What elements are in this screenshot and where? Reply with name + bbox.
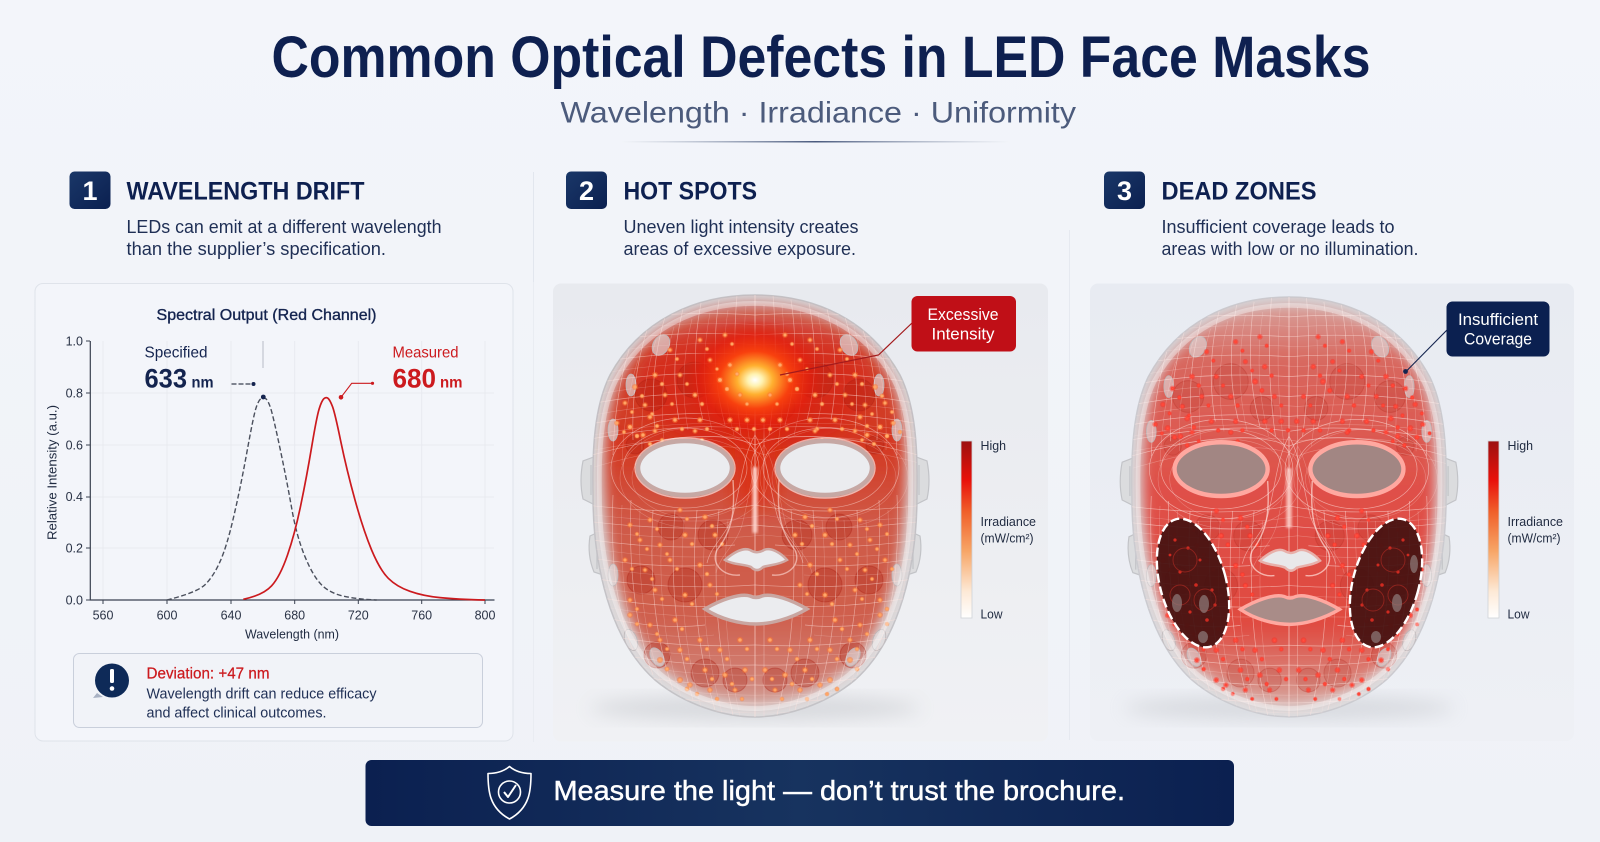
measured curve: [243, 398, 485, 600]
dead zone right: [1337, 511, 1435, 655]
x axis label: Wavelength (nm): [245, 626, 339, 642]
description 3: areas with low or no illumination.: [1162, 239, 1418, 259]
heading 3: DEAD ZONES: [1162, 178, 1316, 206]
mask with hot spot: [581, 295, 934, 727]
title: Common Optical Defects in LED Face Masks: [272, 25, 1370, 90]
mouth: [1240, 596, 1339, 624]
section header 3: dead zones: [1104, 172, 1418, 259]
specified label: Specified: [144, 344, 208, 362]
eye openings: [638, 441, 872, 495]
x axis tick labels: 600: [157, 608, 177, 622]
mouth: [705, 595, 807, 624]
callout: deviation: [74, 654, 482, 728]
legend: irradiance scale: (mW/cm²): [980, 530, 1034, 546]
description 2: [624, 217, 858, 259]
description 1: than the supplier’s specification.: [126, 239, 386, 259]
badge 3: [1104, 172, 1145, 209]
mask with dead zones: [1120, 297, 1463, 727]
description 2: Uneven light intensity creates: [624, 217, 858, 237]
y axis tick labels: 0.4: [66, 490, 83, 504]
nose: [715, 480, 797, 575]
specified label: 633: [144, 364, 187, 394]
specified arrow: [232, 341, 266, 399]
specified curve: [167, 398, 377, 600]
section header 1: wavelength drift: [70, 172, 442, 259]
banner: [366, 760, 1234, 826]
measured label: [392, 344, 462, 394]
panel: dead zones mask: [1090, 284, 1574, 741]
callout: excessive intensity: Excessive: [928, 305, 998, 324]
banner text: Measure the light — don’t trust the brochure.: [554, 775, 1125, 806]
icon: alert: [93, 664, 129, 698]
legend: irradiance scale: (mW/cm²): [1508, 530, 1560, 546]
x axis tick labels: 760: [411, 608, 432, 622]
measured label: nm: [440, 374, 462, 392]
deviation explanation: and affect clinical outcomes.: [146, 706, 326, 722]
callout: insufficient coverage: Coverage: [1464, 330, 1532, 348]
y axis tick labels: 0.8: [66, 386, 83, 400]
subtitle: Wavelength · Irradiance · Uniformity: [560, 96, 1076, 130]
deviation text: Deviation: +47 nm: [146, 666, 270, 682]
y axis tick labels: 1.0: [66, 334, 83, 348]
specified label: [144, 344, 214, 394]
panel: spectral chart: [35, 284, 513, 741]
x axis tick labels: [93, 608, 495, 622]
eye openings: [1175, 442, 1403, 496]
nose: [1250, 481, 1330, 576]
y axis tick labels: [66, 334, 83, 608]
line chart: [44, 334, 495, 642]
x axis tick labels: 560: [93, 608, 113, 622]
measured arrow: [339, 382, 374, 400]
description 3: Insufficient coverage leads to: [1162, 217, 1394, 237]
y axis tick labels: 0.6: [66, 438, 83, 452]
legend: irradiance scale: [1488, 438, 1563, 622]
deviation explanation: Wavelength drift can reduce efficacy: [146, 686, 377, 702]
legend: irradiance scale: [961, 438, 1036, 622]
badge 2: [566, 172, 607, 209]
heading 2: HOT SPOTS: [624, 178, 757, 206]
legend: irradiance scale: High: [980, 438, 1006, 453]
y axis tick labels: 0.0: [66, 594, 83, 608]
x axis tick labels: 680: [284, 608, 305, 622]
measured label: 680: [392, 364, 436, 394]
description 3: [1162, 217, 1418, 259]
badge 1: [70, 172, 110, 209]
legend: irradiance scale: Low: [1508, 606, 1530, 622]
legend: irradiance scale: Low: [980, 606, 1003, 622]
x axis tick labels: 800: [475, 608, 495, 622]
badge 3: 3: [1117, 176, 1132, 206]
section header 2: hot spots: [566, 172, 858, 259]
x axis tick labels: 720: [348, 608, 369, 622]
callout: insufficient coverage: [1403, 302, 1550, 374]
x axis tick labels: 640: [221, 608, 241, 622]
legend: irradiance scale: Irradiance: [1508, 514, 1563, 529]
y axis tick labels: 0.2: [66, 542, 83, 556]
callout: insufficient coverage: Insufficient: [1458, 310, 1538, 329]
badge 1: 1: [82, 176, 98, 206]
measured label: Measured: [392, 344, 458, 362]
dead zone left: [1144, 511, 1242, 655]
y axis label: Relative Intensity (a.u.): [44, 405, 60, 540]
specified label: nm: [192, 374, 214, 392]
description 2: areas of excessive exposure.: [624, 239, 856, 259]
description 1: [126, 217, 442, 259]
description 1: LEDs can emit at a different wavelength: [126, 217, 442, 237]
panel: hot spots mask: [553, 284, 1048, 742]
callout: excessive intensity: Intensity: [932, 324, 995, 344]
callout: excessive intensity: [780, 296, 1016, 375]
icon: shield: [488, 766, 531, 819]
heading 1: WAVELENGTH DRIFT: [126, 178, 364, 206]
badge 2: 2: [579, 176, 594, 206]
deviation explanation: [146, 686, 377, 722]
chart title: Spectral Output (Red Channel): [156, 307, 376, 324]
legend: irradiance scale: Irradiance: [980, 514, 1036, 529]
legend: irradiance scale: High: [1508, 438, 1533, 453]
